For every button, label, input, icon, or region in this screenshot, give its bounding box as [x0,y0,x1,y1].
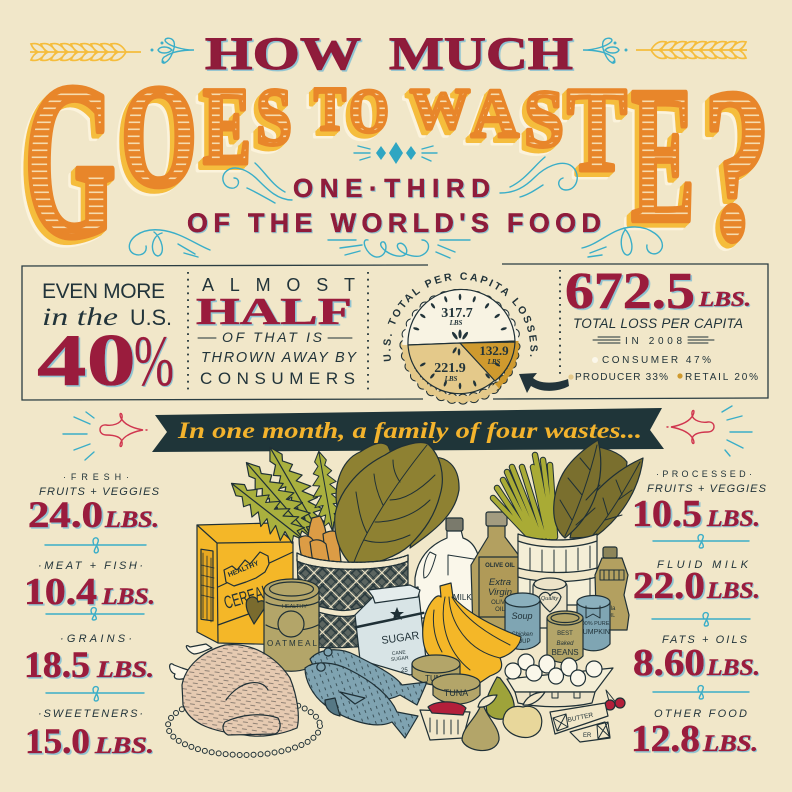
olive oil bottle: Extra [489,577,511,588]
soup can: Soup [511,611,533,621]
divider knot [653,535,749,548]
sugar bag: SUGAR [391,655,409,663]
soup can: Chicken [511,632,533,638]
sugar bag [355,585,427,675]
stat: grains: LBS. [96,657,154,682]
stat: meat and fish: 10.4 [24,571,97,613]
pie labels [434,306,509,383]
stat: fresh fruits and veggies: FRUITS + VEGGIES [39,486,160,498]
cereal box: CEREAL [222,581,271,613]
right flourish [583,38,627,63]
stat: fresh fruits and veggies: ·FRESH· [63,472,129,482]
stat: fresh fruits and veggies: 24.0 [28,495,103,536]
title: goes to waste?: O [349,78,389,146]
divider knot [46,687,144,701]
title: goes to waste?: T [314,76,346,144]
pie labels: 132.9 [479,343,509,358]
panel: total loss per capita: IN 2008 [625,336,682,347]
stat: other food: 12.8 [631,718,700,760]
right basket [518,534,597,605]
tuna cans [412,655,480,704]
title: goes to waste?: G [24,38,116,284]
right rays [722,406,752,456]
swirl top right [500,157,577,197]
stat: fats and oils: FATS + OILS [662,634,748,646]
swirl top left [223,163,292,203]
panel: almost half: ALMOST [202,275,355,295]
panel: even more in the U.S. [37,280,174,402]
big leaf [335,443,442,566]
title: how much [205,28,573,80]
tuna cans: TUNA [444,688,468,698]
butter [550,703,610,742]
title: goes to waste?: E [631,47,695,262]
stat: other food: LBS. [702,731,758,756]
beans can: Baked [556,641,574,647]
raspberries box [420,702,470,740]
stat: processed fruits and veggies: 10.5 [632,493,702,535]
panel: almost half: CONSUMERS [200,369,355,388]
panel: total loss per capita: 672.5 [565,263,695,320]
pie labels: 317.7 [441,306,473,321]
pumpkin can: PUMPKIN [578,629,610,636]
pumpkin can [577,596,610,651]
panel: total loss per capita: LBS. [698,287,751,311]
stat: fluid milk: FLUID MILK [657,559,749,571]
sugar bag: CANE [392,650,407,657]
panel: almost half: THROWN AWAY BY [201,350,357,366]
sugar bag: 25 [401,668,408,674]
olive oil bottle: OIL [495,607,505,613]
olive oil bottle: Virgin [488,587,512,598]
left rays [63,412,94,460]
tuna cans: TUNA [425,674,448,683]
pears and apple [462,677,545,751]
stat: fresh fruits and veggies [28,472,160,536]
stat: meat and fish: ·MEAT + FISH· [38,560,143,572]
carrots [299,516,341,566]
title: goes to waste?: W [410,76,470,141]
stat: fats and oils [633,634,760,684]
stat: sweeteners [25,708,154,761]
stat: sweeteners: LBS. [94,733,154,758]
title: goes to waste? [24,38,771,286]
title: goes to waste?: S [256,71,292,162]
right red flourish [667,410,714,444]
stat: grains [24,633,154,686]
dotted divider 2 [367,272,369,393]
butter: BUTTER [567,712,594,724]
cereal box [197,523,293,645]
stat: processed fruits and veggies: LBS. [706,506,760,531]
circular pie title: U.S. TOTAL PER CAPITA LOSSES. [383,272,538,362]
pie crust scallops [405,294,516,399]
stat: meat and fish [24,560,155,613]
divider knot [46,608,144,620]
title: goes to waste?: O [121,55,197,217]
pumpkin can: 100% PURE [579,621,610,627]
title: how much: HOW [205,28,361,80]
panel: almost half [196,275,357,388]
eggs carton [505,654,613,707]
panel: almost half: HALF [196,291,352,333]
canola bottle: OIL [607,613,615,619]
stat: fats and oils: 8.60 [633,642,705,684]
title: goes to waste?: T [567,63,627,197]
food illustration [168,439,643,755]
banner [152,408,664,452]
title: goes to waste?: A [471,76,519,153]
stat: other food: OTHER FOOD [654,708,747,720]
canola bottle [595,547,629,630]
stat: processed fruits and veggies [632,469,767,535]
stat: other food [631,708,758,760]
stat: grains: ·GRAINS· [60,633,132,645]
left basket [297,553,408,648]
dotted divider 1 [187,272,189,393]
olive oil bottle: OLIVE [491,600,509,606]
slice: retail [460,342,515,381]
swirl bottom right [582,227,662,257]
panel: total loss per capita [565,263,758,383]
fish [305,648,427,738]
divider knot [652,613,750,626]
sugar bag: SUGAR [381,630,420,647]
stat: fluid milk: 22.0 [633,565,705,607]
stat: fluid milk: LBS. [706,578,760,603]
panel: even more in the U.S.: 40 [37,320,136,402]
olive oil bottle [471,512,527,632]
stat: sweeteners: 15.0 [25,721,90,761]
stat: fresh fruits and veggies: LBS. [104,507,159,532]
beans can [547,611,583,663]
stat: fluid milk [633,559,760,607]
subtitle: of the world's food: OF THE WORLD'S FOOD [187,208,601,238]
milk jug: MILK [453,593,472,602]
pie labels: LBS [444,375,458,383]
left wheat ornament [30,44,141,60]
cereal box: HEALTHY [227,560,260,579]
swirl bottom left [129,230,210,257]
diamond ornament [354,142,437,164]
panel: even more in the U.S.: in the [42,304,118,331]
panel: total loss per capita: CONSUMER 47% [602,355,711,366]
panel: total loss per capita: RETAIL 20% [685,372,758,383]
subtitle: one third: ONE·THIRD [293,173,490,203]
slice: producer [408,343,495,394]
pie labels: 221.9 [434,361,466,376]
oatmeal can [264,579,319,671]
beans can: BEST [557,631,573,637]
cherries [605,690,625,710]
butter: ER [583,733,592,739]
swirl bottom centre [328,240,470,258]
oatmeal can: HEALTHY [282,604,307,610]
soup can [505,593,540,650]
pie labels: LBS [449,319,463,327]
panel: total loss per capita: PRODUCER 33% [575,372,668,383]
crust slits [413,294,507,389]
panel: total loss per capita: TOTAL LOSS PER CAPITA [573,316,743,331]
turkey platter [168,697,320,755]
beans can: BEANS [551,648,579,657]
glass jar: Quality [541,596,559,602]
pie chart: per capita losses [383,272,538,405]
back leaves [336,443,459,548]
arrow to pie [519,373,569,393]
banner text: In one month, a family of four wastes... [177,418,642,443]
stats box frame [22,264,768,400]
left red flourish [100,414,147,446]
left flourish [151,38,194,63]
divider knot [45,538,146,553]
greens fronds [222,439,346,553]
panel: even more in the U.S.: U.S. [130,305,172,330]
title: how much: MUCH [389,28,573,80]
oatmeal can: OATMEAL [267,639,318,648]
divider knot [653,686,749,699]
stat: meat and fish: LBS. [101,584,155,609]
milk jug [415,518,481,618]
stat: sweeteners: ·SWEETENERS· [38,708,143,720]
stats: left column [24,472,160,761]
title: goes to waste?: S [524,73,564,164]
bananas [423,583,521,684]
panel: almost half: OF THAT IS [222,329,323,345]
dotted divider 3 [559,270,561,378]
soup can: SOUP [513,639,531,645]
slice: consumer [408,289,515,345]
olive oil bottle: OLIVE OIL [485,563,515,569]
stat: processed fruits and veggies: ·PROCESSED· [656,469,752,479]
dark leaves [554,440,643,538]
stat: grains: 18.5 [24,645,90,686]
panel: even more in the U.S.: % [134,321,174,401]
pie labels: LBS [487,358,501,366]
turkey [170,644,298,736]
right wheat ornament [636,42,747,58]
stats: right column [631,469,767,760]
canola bottle: nola [604,606,616,612]
stat: processed fruits and veggies: FRUITS + VEGGIES [647,483,767,495]
glass jar [533,578,567,628]
green stalks [493,455,555,537]
title: goes to waste?: E [203,65,251,187]
panel: even more in the U.S.: EVEN MORE [42,280,165,303]
stat: fats and oils: LBS. [706,655,760,680]
